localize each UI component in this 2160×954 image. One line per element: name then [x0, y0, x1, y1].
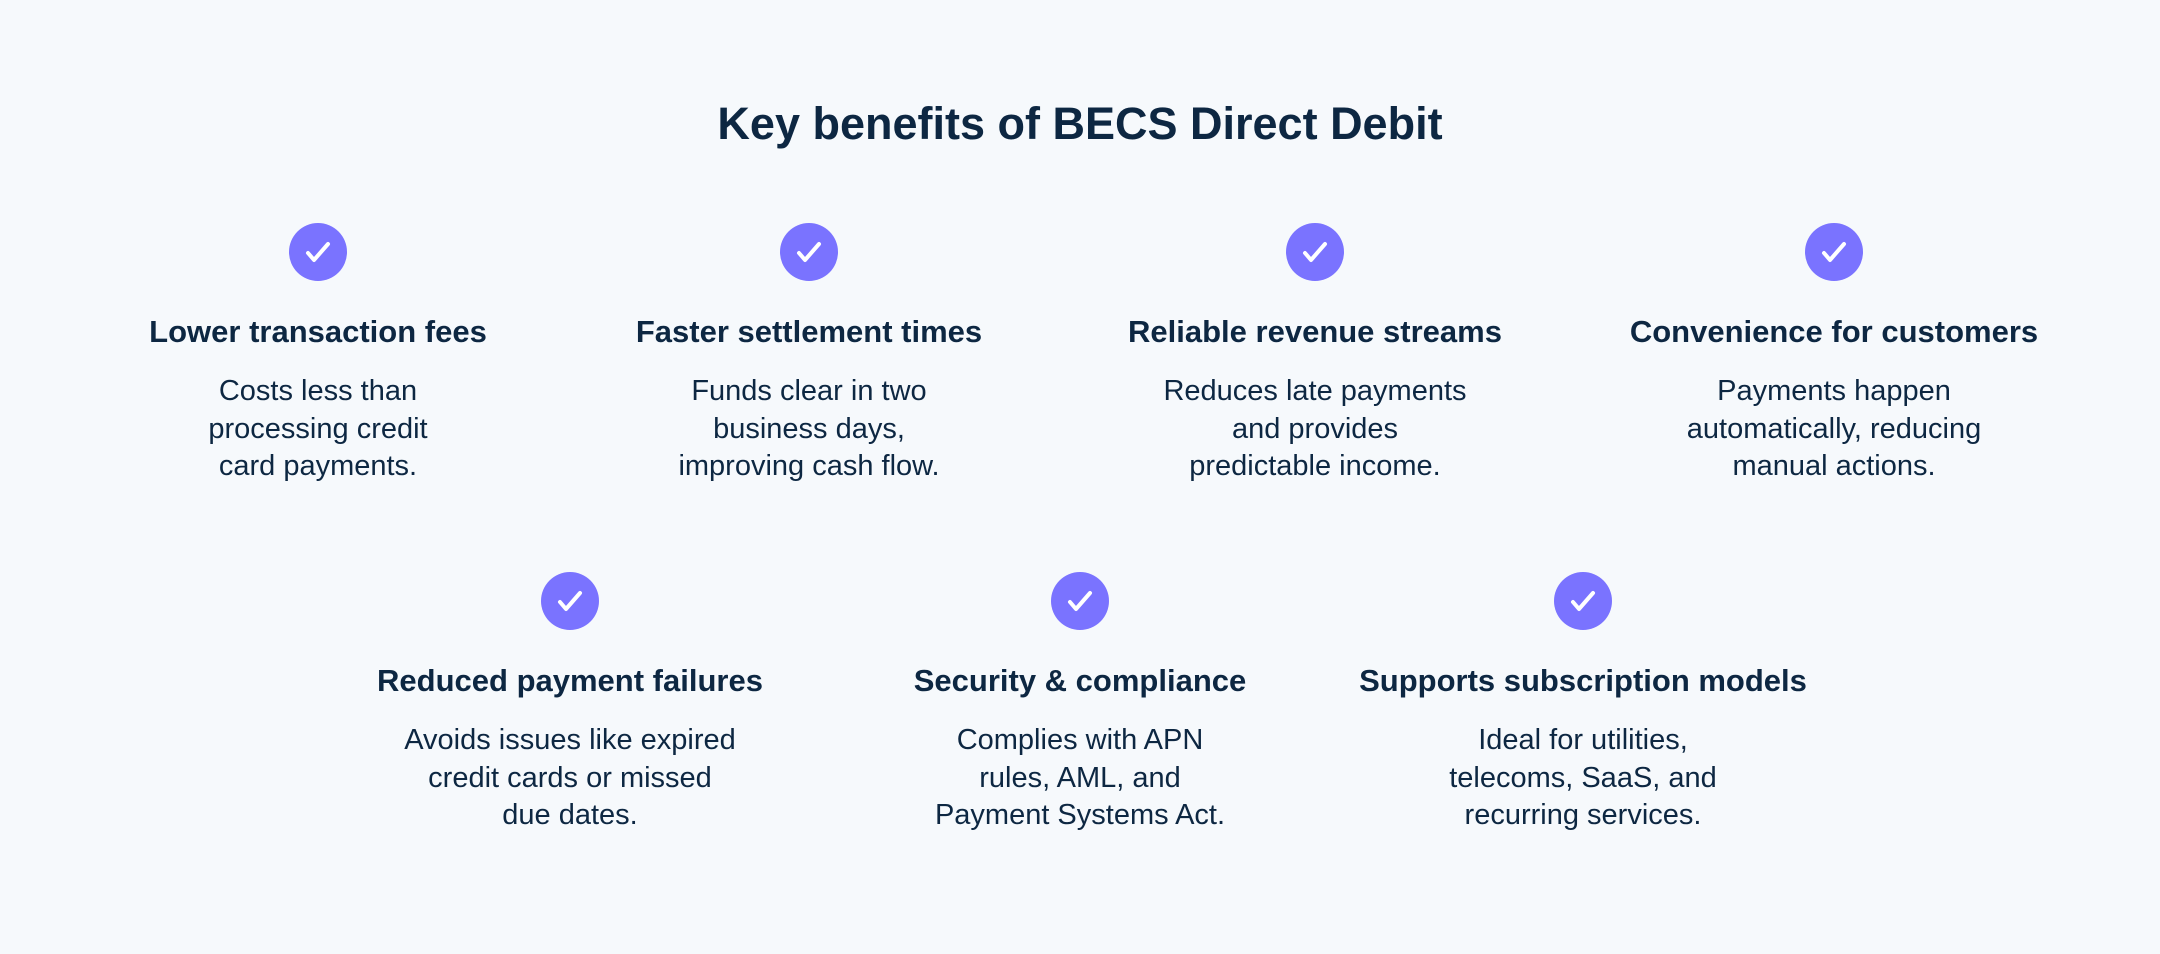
- text: Complies with APN: [957, 724, 1203, 756]
- text: processing credit: [208, 412, 428, 444]
- icon: check: [289, 223, 347, 281]
- heading: Lower transaction fees: [149, 314, 487, 349]
- text: [678, 375, 940, 482]
- text: predictable income.: [1189, 450, 1441, 482]
- text: Payment Systems Act.: [935, 799, 1225, 831]
- heading: Convenience for customers: [1630, 314, 2038, 349]
- text: Payments happen: [1717, 375, 1951, 407]
- text: due dates.: [502, 799, 638, 831]
- heading: Faster settlement times: [636, 314, 982, 349]
- heading: Reduced payment failures: [377, 663, 763, 698]
- icon: check: [541, 572, 599, 630]
- text: business days,: [713, 412, 905, 444]
- text: and provides: [1232, 412, 1398, 444]
- icon: check: [1805, 223, 1863, 281]
- text: credit cards or missed: [428, 762, 712, 794]
- text: manual actions.: [1732, 450, 1936, 482]
- item: convenience: [1630, 223, 2038, 482]
- text: Funds clear in two: [691, 375, 927, 407]
- text: Costs less than: [219, 375, 417, 407]
- text: [404, 724, 736, 831]
- text: telecoms, SaaS, and: [1449, 762, 1717, 794]
- text: [1163, 375, 1467, 482]
- text: Reduces late payments: [1163, 375, 1467, 407]
- heading: Security & compliance: [914, 663, 1246, 698]
- text: card payments.: [219, 450, 417, 482]
- text: improving cash flow.: [678, 450, 940, 482]
- icon: check: [1286, 223, 1344, 281]
- item: faster settlement: [636, 223, 982, 482]
- text: [208, 375, 428, 482]
- text: recurring services.: [1465, 799, 1701, 831]
- text: [935, 724, 1225, 831]
- icon: check: [1554, 572, 1612, 630]
- icon: check: [780, 223, 838, 281]
- icon: check: [1051, 572, 1109, 630]
- text: [1687, 375, 1981, 482]
- item: lower transaction fees: [149, 223, 487, 482]
- item: security: [914, 572, 1246, 831]
- text: rules, AML, and: [979, 762, 1181, 794]
- text: Avoids issues like expired: [404, 724, 736, 756]
- item: reliable revenue: [1128, 223, 1502, 482]
- heading: Supports subscription models: [1359, 663, 1807, 698]
- title: Key benefits of BECS Direct Debit: [717, 98, 1443, 149]
- text: Ideal for utilities,: [1478, 724, 1688, 756]
- text: [1449, 724, 1717, 831]
- heading: Reliable revenue streams: [1128, 314, 1502, 349]
- item: reduced failures: [377, 572, 763, 831]
- item: subscriptions: [1359, 572, 1807, 831]
- text: automatically, reducing: [1687, 412, 1981, 444]
